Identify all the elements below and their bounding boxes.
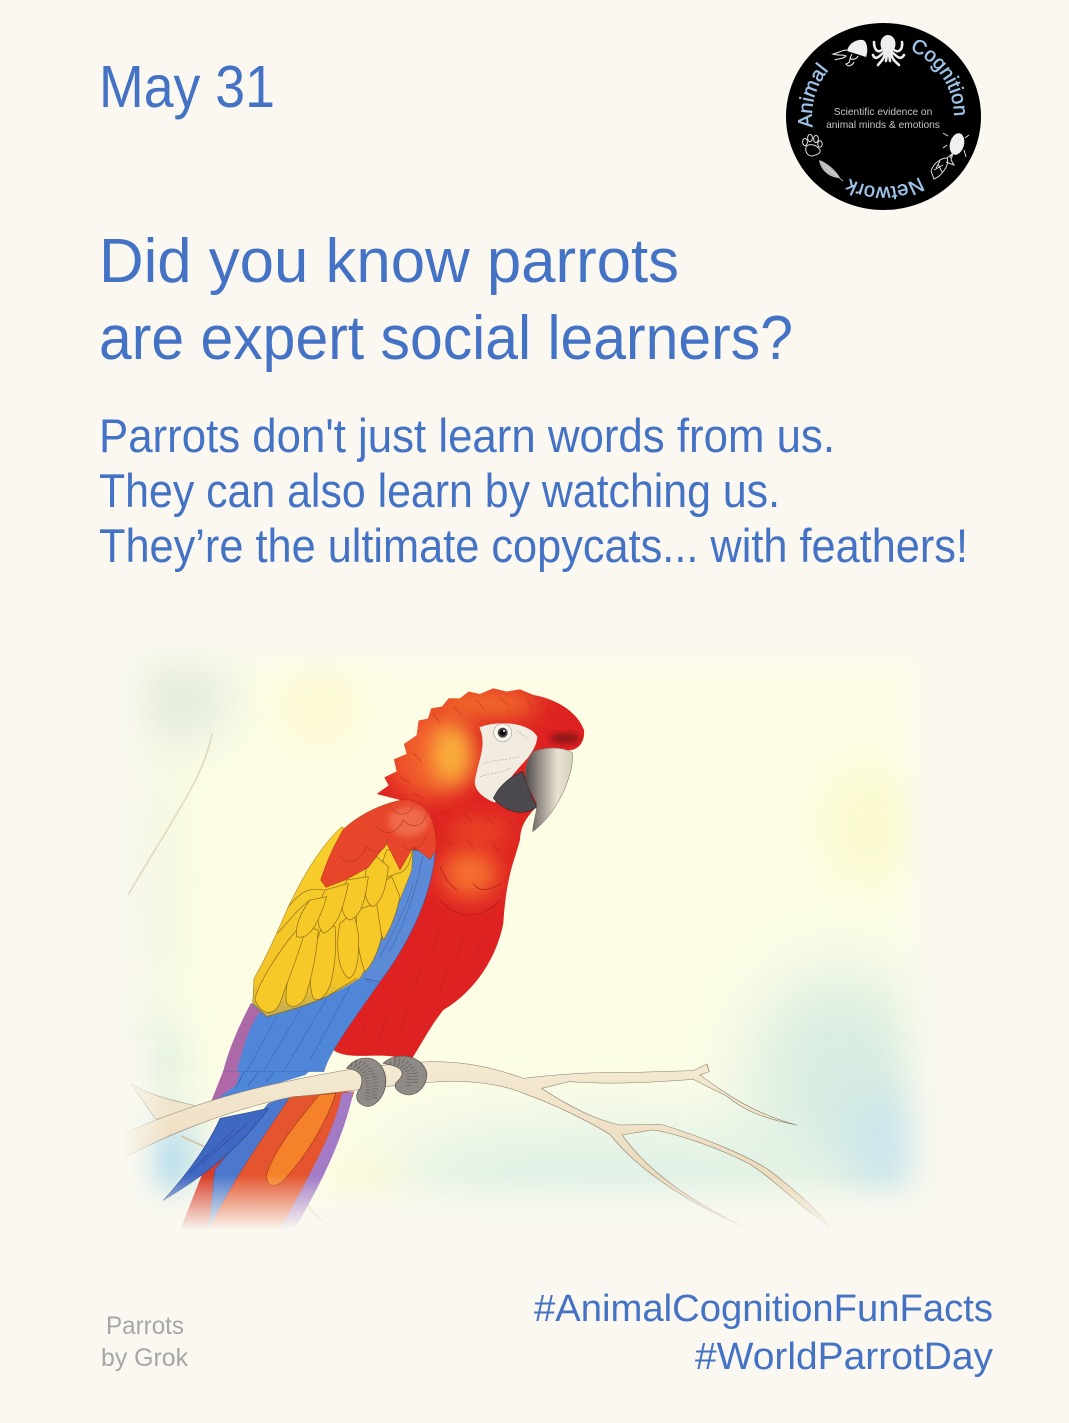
eye <box>494 724 512 742</box>
face wrinkle lines <box>480 730 528 777</box>
lower beak <box>493 772 537 812</box>
logo ring text <box>798 40 965 200</box>
faint upper-left twig <box>128 733 212 895</box>
tail feathers <box>163 1027 354 1237</box>
hashtags: #AnimalCognitionFunFacts <box>534 1288 993 1330</box>
hashtags <box>534 1288 993 1378</box>
wing <box>223 799 436 1072</box>
parrot body and head <box>330 688 584 1062</box>
logo ring text: Cognition <box>912 40 965 116</box>
orange nape and chest shading <box>387 688 580 915</box>
icon: octopus <box>873 35 904 65</box>
red shoulder feathers <box>321 799 436 887</box>
blue flight feathers <box>355 850 435 982</box>
body text: They can also learn by watching us. <box>99 464 780 517</box>
logo ring text: Network <box>844 178 924 200</box>
upper tail blue and violet <box>223 978 380 1072</box>
image credit: by Grok <box>101 1344 188 1372</box>
logo tagline <box>826 107 940 131</box>
parrot feet <box>346 1056 427 1107</box>
logo ring text: Animal <box>798 62 828 128</box>
image credit: Parrots <box>106 1312 184 1340</box>
re-stated yellow tips over tail <box>253 978 357 1017</box>
hashtags: #WorldParrotDay <box>695 1336 993 1378</box>
image credit <box>101 1312 188 1372</box>
body <box>330 688 584 1062</box>
icon: jellyfish <box>833 40 867 66</box>
body text: Parrots don't just learn words from us. <box>99 409 835 462</box>
logo tagline: animal minds & emotions <box>826 120 940 131</box>
title: are expert social learners? <box>99 304 793 373</box>
yellow coverts <box>253 827 413 1017</box>
logo tagline: Scientific evidence on <box>834 107 932 118</box>
title <box>99 227 793 373</box>
infographic page <box>100 23 993 1377</box>
rear foot <box>383 1056 427 1095</box>
upper beak <box>526 748 573 832</box>
white face patch <box>475 723 537 803</box>
branch <box>110 1062 830 1227</box>
icon: fish <box>931 153 954 179</box>
yellow feather row <box>255 847 413 1012</box>
date heading: May 31 <box>99 54 275 120</box>
body text: They’re the ultimate copycats... with feathers! <box>99 519 968 572</box>
front foot <box>346 1058 386 1107</box>
illustration: watercolour macaw on a branch <box>124 659 926 1228</box>
icon: beetle <box>943 132 969 158</box>
body text <box>99 409 968 572</box>
icon: paw <box>803 134 822 156</box>
icon: feather <box>819 160 843 181</box>
feather texture strokes <box>360 698 570 1043</box>
watercolour wash background <box>140 659 926 1204</box>
soft edge fades <box>90 1040 960 1250</box>
title: Did you know parrots <box>99 227 679 296</box>
logo: Animal Cognition Network <box>786 23 981 210</box>
